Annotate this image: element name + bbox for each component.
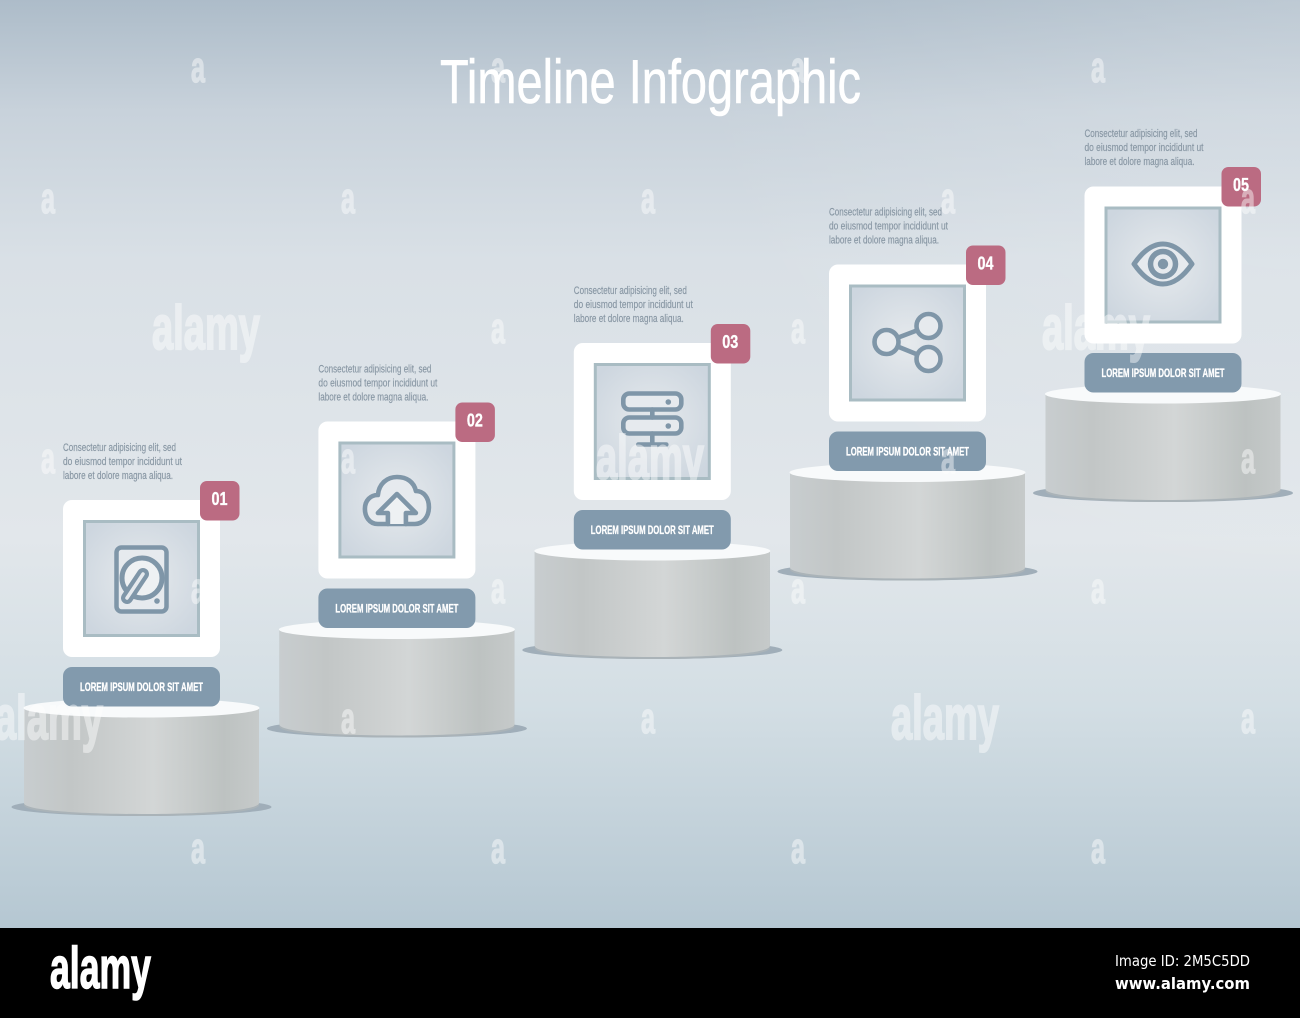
icon: eye [1134, 244, 1192, 284]
label 4: LOREM IPSUM DOLOR SIT AMET [846, 446, 969, 458]
watermarks: alamy [1042, 294, 1150, 363]
description 2: do eiusmod tempor incididunt ut [318, 378, 437, 390]
description 3 [574, 285, 693, 325]
label 5: LOREM IPSUM DOLOR SIT AMET [1102, 368, 1224, 380]
website: www.alamy.com [1115, 974, 1250, 993]
watermarks: alamy [0, 684, 103, 753]
icon: cloud upload [365, 477, 429, 524]
watermarks: a [491, 304, 505, 353]
description 1 [63, 442, 182, 482]
watermarks: a [791, 824, 805, 873]
icon: share [874, 314, 940, 371]
step 3 [522, 285, 782, 659]
badge 03: 03 [722, 332, 738, 352]
badge 01 [200, 481, 240, 520]
badge 02: 02 [467, 410, 483, 430]
watermarks: a [641, 694, 655, 743]
description 1: do eiusmod tempor incididunt ut [63, 456, 182, 468]
watermarks: a [1091, 824, 1105, 873]
description 4 [829, 206, 948, 246]
badge 05: 05 [1233, 175, 1249, 195]
watermarks: a [341, 694, 355, 743]
title: Timeline Infographic [440, 48, 861, 117]
watermarks: a [341, 434, 355, 483]
badge 04 [966, 246, 1006, 285]
pedestal 3 [522, 542, 782, 659]
watermarks: a [41, 434, 55, 483]
watermarks: a [1241, 694, 1255, 743]
description 4: labore et dolore magna aliqua. [829, 234, 939, 246]
card 2 [318, 422, 475, 578]
watermarks: a [191, 564, 205, 613]
footer bar [0, 928, 1300, 1018]
pedestal 5 [1033, 384, 1293, 502]
card 4 [829, 264, 986, 422]
badge 05 [1222, 167, 1261, 206]
watermarks: a [641, 174, 655, 223]
step 1 [12, 442, 272, 816]
badge 01: 01 [212, 489, 228, 509]
label 3 [574, 510, 731, 550]
description 3: Consectetur adipisicing elit, sed [574, 285, 687, 297]
pedestal 4 [778, 463, 1038, 580]
description 5: labore et dolore magna aliqua. [1084, 156, 1194, 168]
pedestal 1 [12, 698, 272, 816]
watermarks: a [1091, 43, 1105, 92]
step 5 [1033, 128, 1293, 502]
watermarks: a [191, 824, 205, 873]
description 5: do eiusmod tempor incididunt ut [1084, 142, 1204, 154]
watermarks: a [491, 43, 505, 92]
watermarks: a [41, 174, 55, 223]
label 1: LOREM IPSUM DOLOR SIT AMET [80, 682, 203, 694]
label 1 [63, 667, 220, 706]
label 2 [318, 588, 475, 628]
card 3 [574, 343, 731, 500]
watermarks: alamy [891, 684, 999, 753]
badge 02 [455, 402, 495, 442]
watermarks: alamy [596, 424, 704, 493]
watermarks: a [941, 174, 955, 223]
description 2 [318, 364, 437, 404]
watermarks: a [791, 43, 805, 92]
badge 04: 04 [978, 254, 994, 274]
watermarks [0, 43, 1255, 873]
pedestal 2 [267, 620, 527, 738]
watermarks: a [1241, 434, 1255, 483]
description 3: do eiusmod tempor incididunt ut [574, 299, 693, 311]
badge 03 [711, 324, 750, 364]
card 1 [63, 500, 220, 657]
icon: server [623, 394, 681, 444]
watermarks: a [791, 564, 805, 613]
watermarks: a [491, 824, 505, 873]
watermarks: a [341, 174, 355, 223]
label 4 [829, 432, 986, 471]
description 5 [1084, 128, 1204, 168]
description 5: Consectetur adipisicing elit, sed [1084, 128, 1198, 140]
description 4: do eiusmod tempor incididunt ut [829, 220, 948, 232]
description 2: labore et dolore magna aliqua. [318, 392, 428, 404]
watermarks: alamy [152, 294, 260, 363]
watermarks: a [191, 43, 205, 92]
label 2: LOREM IPSUM DOLOR SIT AMET [335, 604, 458, 616]
watermarks: a [941, 434, 955, 483]
description 2: Consectetur adipisicing elit, sed [318, 364, 431, 376]
description 3: labore et dolore magna aliqua. [574, 313, 684, 325]
card 5 [1084, 186, 1242, 344]
label 3: LOREM IPSUM DOLOR SIT AMET [591, 525, 714, 537]
step 4 [778, 206, 1038, 580]
description 1: Consectetur adipisicing elit, sed [63, 442, 176, 454]
image id: Image ID: 2M5C5DD [1115, 952, 1250, 970]
step 2 [267, 364, 527, 738]
icon: hard drive [116, 548, 166, 612]
watermarks: a [491, 564, 505, 613]
watermarks: a [1091, 564, 1105, 613]
description 1: labore et dolore magna aliqua. [63, 470, 173, 482]
label 5 [1084, 353, 1242, 392]
description 4: Consectetur adipisicing elit, sed [829, 206, 942, 218]
watermarks: a [791, 304, 805, 353]
watermarks: a [1241, 174, 1255, 223]
footer logo: alamy [50, 936, 151, 1001]
